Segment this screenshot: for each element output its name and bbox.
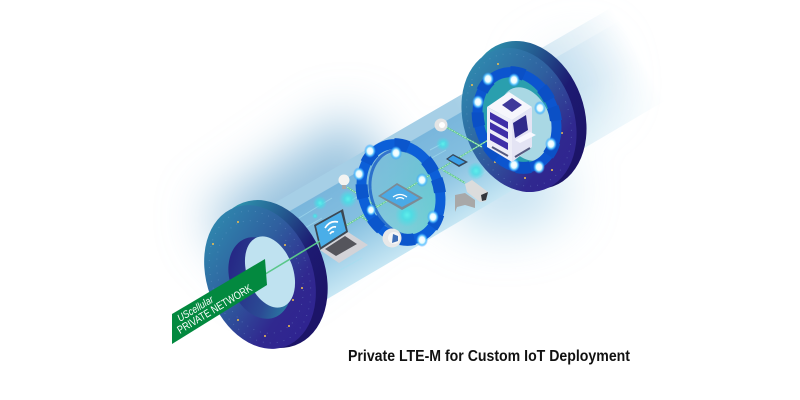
icon: round router — [382, 228, 402, 248]
green network lines — [262, 127, 500, 276]
ring dots — [192, 197, 328, 357]
icon: light bulb — [338, 174, 350, 189]
gold sparkle dots — [212, 221, 303, 337]
icon: wall sensor — [434, 118, 448, 132]
ring opening wall — [217, 228, 303, 328]
server tower — [487, 92, 536, 162]
light beam tube — [281, 17, 642, 299]
keyboard ledge — [515, 132, 536, 143]
ring opening — [236, 229, 304, 315]
ring opening — [465, 61, 569, 179]
blue bolted collar — [465, 61, 569, 179]
brand strips — [492, 147, 530, 157]
middle ring glass — [349, 133, 453, 251]
drive bays — [490, 112, 508, 150]
banner text: UScellular — [175, 293, 216, 325]
front ring — [185, 183, 348, 365]
ring side — [447, 24, 607, 206]
soft background glow — [205, 40, 610, 285]
bolted collar — [349, 133, 453, 251]
icon: laptop — [314, 209, 368, 263]
ring dots — [449, 39, 589, 201]
collar lights — [472, 72, 557, 174]
glowing orbs — [312, 137, 485, 227]
banner: USCellular private network: PRIVATE NETWORK — [175, 282, 255, 337]
ring face — [185, 189, 335, 365]
side panel — [513, 115, 528, 138]
icon: tablet — [378, 183, 423, 210]
collar lights — [353, 144, 439, 247]
ring face — [442, 32, 596, 208]
ring side — [190, 183, 348, 365]
icon: smartphone — [446, 154, 468, 167]
infographic illustration — [172, 16, 644, 364]
beam streaks — [299, 130, 492, 270]
top vent — [502, 98, 522, 112]
gold sparkle dots — [471, 63, 563, 179]
title: Private LTE-M for Custom IoT Deployment — [348, 348, 630, 365]
green line through ring — [262, 241, 320, 276]
icon: security camera — [455, 180, 488, 212]
back ring — [442, 24, 607, 208]
middle ring — [349, 133, 453, 251]
